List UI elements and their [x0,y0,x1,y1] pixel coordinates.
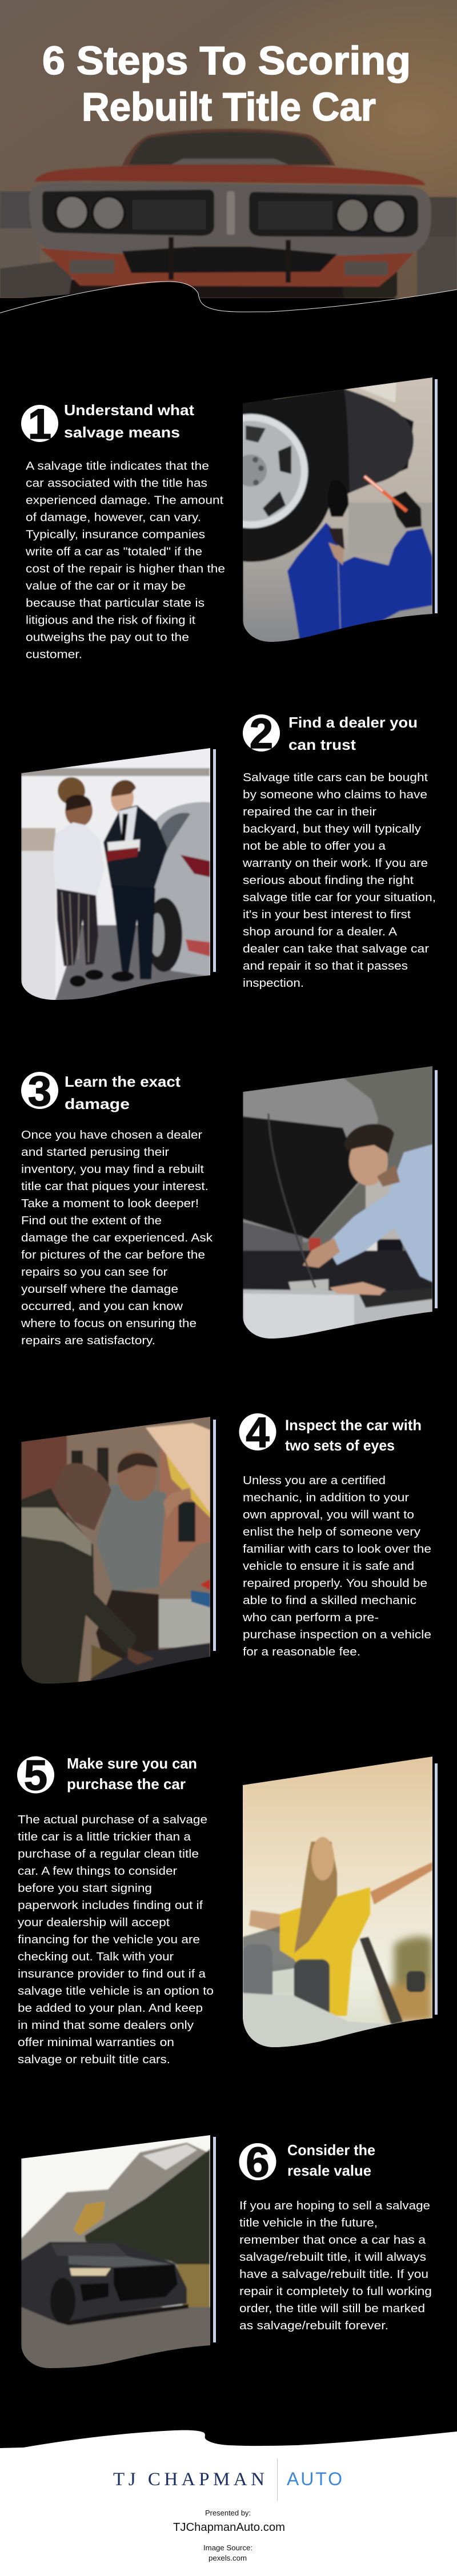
step 6 heading: Consider the [287,2141,375,2159]
step 1 heading: Understand what [64,401,194,419]
footer white wave background [0,2430,457,2576]
step 2 number badge: 2 [250,710,273,757]
presented by credit [173,2509,285,2534]
step 3 body text: repairs so you can see for [21,1266,167,1279]
step 3 body text: for pictures of the car before the [21,1249,205,1261]
step 6 number badge: 6 [246,2139,270,2186]
step 4 body text: who can perform a pre- [242,1611,379,1624]
step 3 body text: damage the car experienced. Ask [21,1232,213,1244]
step 5 body text: checking out. Talk with your [18,1951,174,1963]
step 3 body text: occurred, and you can know [21,1300,183,1313]
step 1 body text: cost of the repair is higher than the [26,563,225,576]
step 5 body text: be added to your plan. And keep [18,2002,203,2015]
step 6 heading [287,2141,375,2179]
step 6 body text: have a salvage/rebuilt title. If you [239,2268,428,2281]
step 1 body text: of damage, however, can vary. [26,512,201,524]
step 6 body text: as salvage/rebuilt forever. [239,2320,388,2332]
step 2 panel [21,710,436,1002]
step 5 panel [17,1752,438,2066]
logo: TJ Chapman Auto [113,2458,342,2501]
step 4 body text: purchase inspection on a vehicle [243,1629,431,1641]
step 5 body text: offer minimal warranties on [18,2036,174,2049]
step 4 body text: for a reasonable fee. [243,1646,360,1658]
step 4 number badge [239,1409,276,1456]
main title: 6 Steps To Scoring [42,38,411,83]
step 2 body text: backyard, but they will typically [243,823,421,835]
step 2 body text: and repair it so that it passes [243,960,408,972]
step 2 body text: repaired the car in their [243,806,376,818]
step 3 body text: Find out the extent of the [21,1215,162,1227]
step 5 body text: salvage or rebuilt title cars. [18,2053,170,2066]
step 2 body text: not be able to offer you a [243,840,386,853]
step 3 number badge: 3 [28,1067,51,1115]
step 1 accent bar [435,379,438,613]
black wave edge under header [0,282,457,343]
step 1 body text: write off a car as "totaled" if the [25,546,202,558]
step 6 number badge [239,2139,276,2186]
step 1 body text: experienced damage. The amount [26,495,223,507]
main title [42,38,411,129]
step 5 accent bar [435,1763,438,2015]
step 4 photo: two men inspecting a car engine [21,1413,213,1687]
step 1 photo: mechanic under a lifted car [243,377,432,642]
step 6 body text: If you are hoping to sell a salvage [239,2200,430,2212]
step 5 heading: Make sure you can [67,1755,197,1772]
step 6 body text [239,2200,432,2332]
step 3 body text: Take a moment to look deeper! [21,1197,199,1210]
step 1 body text: value of the car or it may be [26,580,186,593]
header photo: red Dodge car at dusk [0,0,457,298]
step 4 accent bar [213,1420,216,1651]
step 3 body text [21,1129,213,1347]
step 1 panel [21,374,438,661]
logo: TJ Chapman Auto: TJ CHAPMAN [113,2469,264,2490]
step 5 heading [67,1755,197,1793]
logo: TJ Chapman Auto: AUTO [287,2469,342,2489]
step 6 body text: salvage/rebuilt title, it will always [239,2251,426,2264]
step 6 photo: grey Audi on a mountain road [21,2133,213,2373]
step 1 body text: outweighs the pay out to the [26,632,189,644]
step 4 body text: Unless you are a certified [243,1474,386,1487]
step 1 body text: car associated with the title has [26,477,207,490]
step 1 body text: customer. [26,649,82,661]
step 3 body text: where to focus on ensuring the [21,1317,197,1330]
step 2 body text [242,771,436,990]
step 2 photo: couple at car dealership [21,745,213,1002]
step 1 body text: Typically, insurance companies [26,529,205,541]
step 4 panel [21,1409,431,1687]
step 5 body text: paperwork includes finding out if [18,1899,203,1912]
step 2 body text: inspection. [243,977,304,990]
step 5 photo: woman with arms out in a convertible [243,1753,434,2050]
step 4 body text: vehicle to ensure it is safe and [243,1560,414,1573]
presented by credit: TJChapmanAuto.com [173,2521,285,2534]
step 4 heading: two sets of eyes [285,1437,395,1454]
step 3 panel [21,1062,438,1347]
step 1 number badge [21,400,58,448]
step 4 body text: repaired properly. You should be [243,1577,427,1590]
step 2 heading: can trust [288,736,356,753]
step 1 heading [64,401,194,441]
step 4 heading: Inspect the car with [285,1416,422,1433]
step 4 number badge: 4 [246,1409,270,1456]
step 6 body text: repair it completely to full working [239,2285,432,2298]
step 2 accent bar [213,749,216,972]
step 2 heading [288,714,418,753]
step 5 body text [18,1814,214,2066]
step 2 body text: shop around for a dealer. A [243,926,398,938]
step 5 body text: in mind that some dealers only [18,2019,194,2032]
step 2 body text: salvage title car for your situation, [243,891,436,904]
step 3 body text: and started perusing their [21,1146,169,1159]
step 5 body text: your dealership will accept [18,1916,170,1929]
step 6 body text: order, the title will still be marked [239,2302,425,2315]
step 3 accent bar [435,1070,438,1308]
step 1 body text: A salvage title indicates that the [26,460,209,473]
presented by credit: Presented by: [205,2509,251,2517]
step 3 body text: repairs are satisfactory. [21,1335,155,1347]
step 4 body text [242,1474,431,1658]
step 6 panel [21,2133,432,2373]
step 3 body text: title car that piques your interest. [21,1180,209,1193]
step 3 heading: Learn the exact [65,1073,181,1090]
step 1 body text: litigious and the risk of fixing it [26,614,195,627]
image source credit: Image Source: [203,2543,252,2552]
step 1 heading: salvage means [64,424,180,441]
step 1 body text: because that particular state is [26,597,205,610]
step 5 body text: car. A few things to consider [18,1865,177,1878]
step 3 heading: damage [65,1095,130,1112]
step 2 number badge [243,710,280,757]
step 2 body text: by someone who claims to have [243,789,427,801]
step 3 heading [65,1073,181,1112]
step 5 body text: purchase of a regular clean title [18,1848,199,1860]
footer panel [0,2430,457,2576]
step 5 body text: The actual purchase of a salvage [18,1814,207,1826]
step 5 number badge [17,1752,54,1799]
step 5 body text: salvage title vehicle is an option to [18,1985,214,1998]
step 5 body text: title car is a little trickier than a [18,1831,191,1843]
step 5 body text: insurance provider to find out if a [18,1968,206,1980]
step 6 body text: remember that once a car has a [239,2234,426,2247]
step 4 body text: able to find a skilled mechanic [243,1594,416,1607]
step 3 body text: Once you have chosen a dealer [21,1129,202,1142]
step 3 body text: inventory, you may find a rebuilt [21,1163,204,1176]
step 4 body text: enlist the help of someone very [243,1526,420,1538]
step 3 number badge [21,1067,58,1115]
step 1 number badge: 1 [28,400,51,448]
step 5 number badge: 5 [24,1752,47,1799]
step 6 body text: title vehicle in the future, [239,2217,378,2229]
step 6 heading: resale value [287,2162,371,2179]
step 4 heading [285,1416,422,1454]
step 3 body text: yourself where the damage [21,1283,178,1296]
step 2 body text: dealer can take that salvage car [243,943,429,955]
step 5 body text: financing for the vehicle you are [18,1934,200,1946]
step 2 body text: warranty on their work. If you are [242,857,428,870]
step 5 heading: purchase the car [67,1775,186,1793]
image source credit: pexels.com [209,2554,247,2562]
step 4 body text: own approval, you will want to [243,1509,414,1521]
step 2 body text: Salvage title cars can be bought [243,771,428,784]
step 5 body text: before you start signing [18,1882,152,1895]
step 4 body text: familiar with cars to look over the [243,1543,431,1556]
image source credit [203,2543,252,2562]
step 2 heading: Find a dealer you [288,714,418,731]
main title: Rebuilt Title Car [82,85,376,129]
step 1 body text [25,460,225,661]
step 2 body text: serious about finding the right [243,874,414,887]
step 4 body text: mechanic, in addition to your [243,1492,409,1504]
step 6 accent bar [213,2137,216,2342]
step 2 body text: it's in your best interest to first [243,909,411,921]
step 3 photo: man checking an engine under open hood [243,1062,434,1342]
